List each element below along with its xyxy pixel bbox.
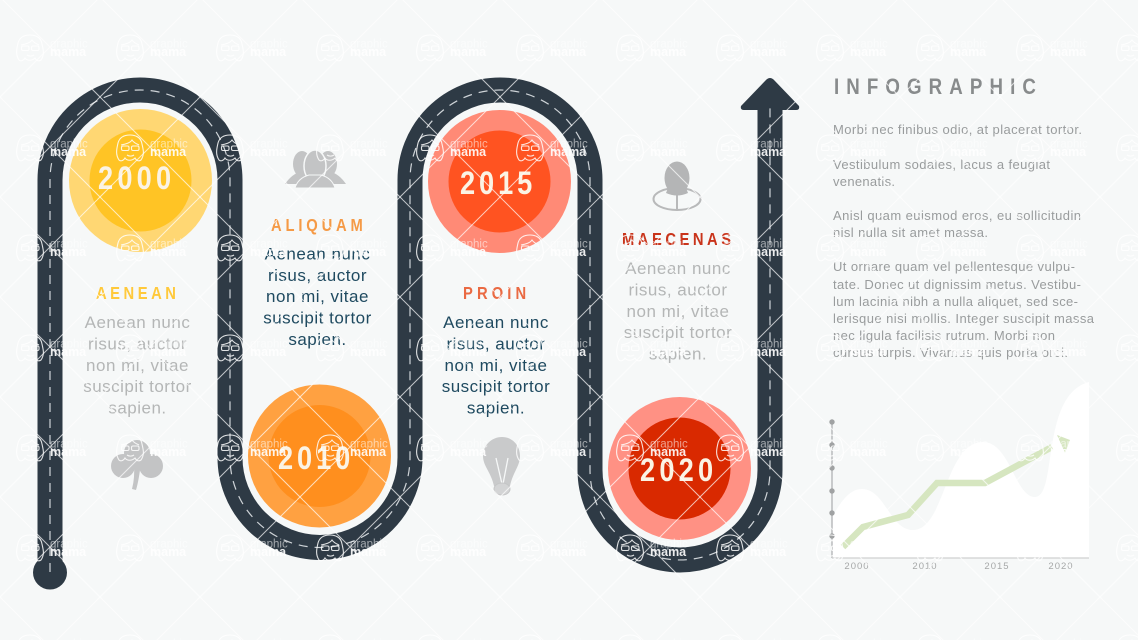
text block: Aliquam: Aenean nunc [265,244,370,264]
text block: Maecenas: risus, auctor [628,280,728,300]
text block: Proin: risus, auctor [446,334,546,354]
text block: Maecenas: Aenean nunc [625,259,731,278]
side text column: Ut ornare quam vel pellentesque vulpu- [833,259,1075,274]
text block: Maecenas: sapien. [649,344,707,364]
side text column: Anisl quam euismod eros, eu sollicitudin [833,208,1081,223]
side text column: cursus turpis. Vivamus quis porta orci. [833,345,1068,360]
text block: Aliquam: ALIQUAM [271,216,363,235]
axis labels: 2000 [844,561,870,572]
side text column: nec ligula facilisis rutrum. Morbi non [833,328,1055,343]
winding road timeline [33,78,799,590]
text block: Proin [442,284,550,418]
text block: Maecenas: non mi, vitae [627,302,729,321]
text block: Aenean: suscipit tortor [83,377,192,396]
text block: Proin: PROIN [463,284,526,303]
text block: Maecenas: suscipit tortor [624,323,732,342]
icon: light bulb [483,437,520,495]
icon: shamrock [111,440,163,490]
side text column: Vestibulum sodales, lacus a feugiat [833,157,1050,172]
axis labels [844,561,1074,572]
side text column [833,122,1095,360]
axis labels: 2020 [1048,561,1074,572]
side text column: tate. Donec ut dignissim metus. Vestibu- [833,277,1081,292]
milestone circle: 2010: 2010 [278,441,350,477]
chart axes [829,419,1089,558]
milestone circle: 2010 [248,384,391,528]
text block: Aenean: risus, auctor [88,334,187,354]
title: INFOGRAPHIC [834,76,1036,99]
text block: Aenean [83,284,192,418]
icon: person pin [654,162,700,210]
chart area [832,382,1089,558]
side text column: lerisque nisi mollis. Integer suscipit massa [833,311,1095,326]
text block: Aenean: Aenean nunc [85,313,190,332]
icon: group of people [285,150,346,188]
text block: Aliquam: suscipit tortor [263,308,372,328]
milestone circle: 2015: 2015 [460,166,532,202]
milestone circle: 2015 [428,110,571,253]
text block: Aliquam: risus, auctor [268,266,367,285]
text block: Aenean: AENEAN [96,284,176,303]
text block: Proin: Aenean nunc [443,313,549,332]
milestone circle: 2020 [608,397,751,540]
text block: Maecenas: MAECENAS [622,230,731,249]
text block: Aliquam: non mi, vitae [266,287,369,306]
text block: Aenean: sapien. [108,398,167,418]
growth chart [829,382,1089,572]
axis labels: 2015 [984,561,1010,572]
side text column: lum lacinia nibh a nulla aliquet, sed sce- [833,294,1078,309]
side text column: Morbi nec finibus odio, at placerat tortor. [833,122,1082,137]
axis labels: 2010 [912,561,938,572]
text block: Aliquam: sapien. [288,330,347,349]
text block: Proin: sapien. [467,398,525,418]
milestone circle: 2000: 2000 [98,161,171,197]
text block: Proin: non mi, vitae [445,356,547,375]
trend arrow [843,435,1070,547]
text block: Maecenas [622,230,732,364]
text block: Proin: suscipit tortor [442,377,550,396]
side text column: venenatis. [833,174,895,189]
text block: Aliquam [263,216,372,349]
text block: Aenean: non mi, vitae [86,356,189,375]
side text column: nisl nulla sit amet massa. [833,225,988,240]
milestone circle: 2020: 2020 [640,453,713,489]
milestone circle: 2000 [69,109,212,252]
